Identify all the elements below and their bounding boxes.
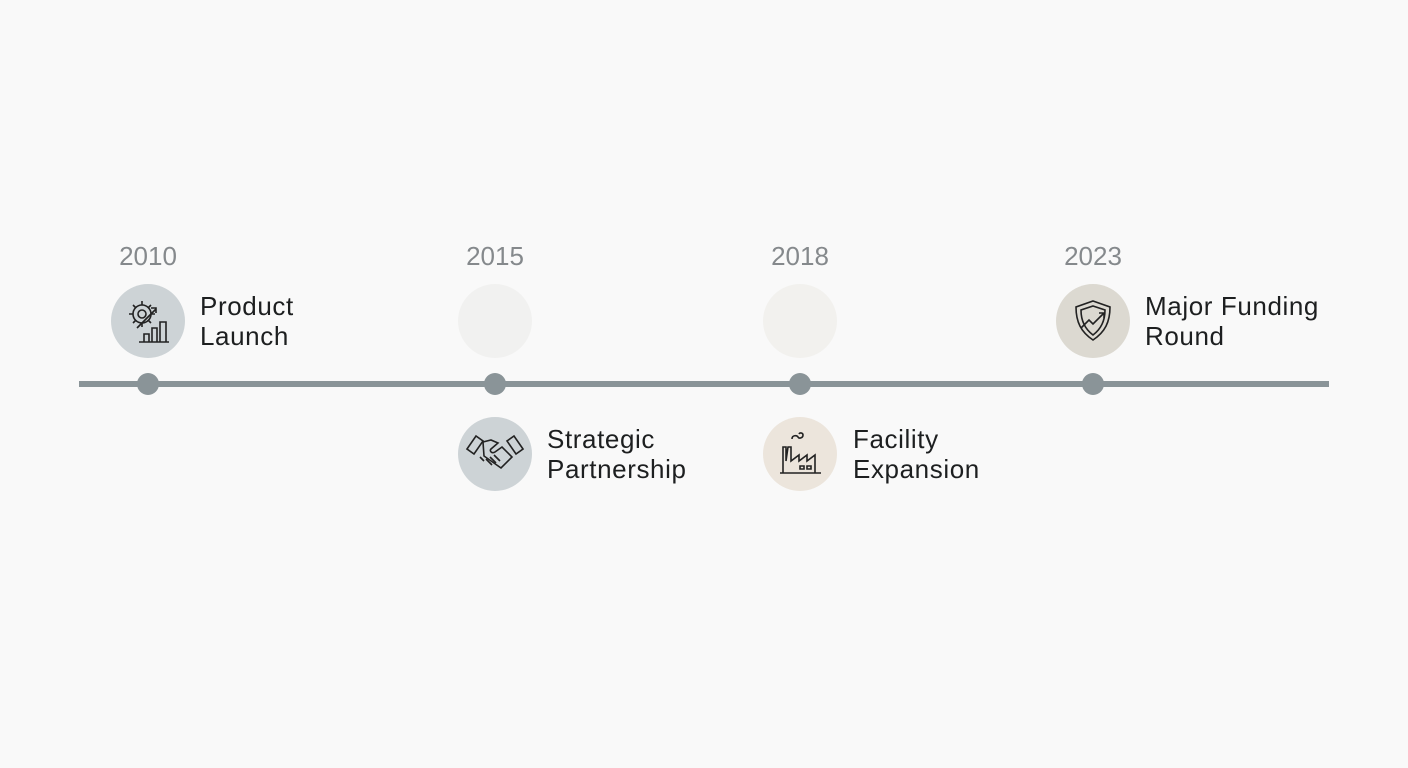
timeline axis bbox=[79, 381, 1329, 387]
label: Facility Expansion: Facility bbox=[853, 424, 939, 454]
icon: gear chart bbox=[111, 284, 185, 358]
label: Major Funding Round: Round bbox=[1145, 321, 1225, 351]
label: Strategic Partnership: Strategic bbox=[547, 424, 655, 454]
label: Product Launch: Product bbox=[200, 291, 294, 321]
year 2015: 2015 bbox=[466, 241, 524, 271]
year 2018: 2018 bbox=[771, 241, 829, 271]
label: Facility Expansion bbox=[853, 424, 980, 484]
label: Major Funding Round: Major Funding bbox=[1145, 291, 1319, 321]
icon: handshake bbox=[458, 417, 532, 491]
label: Product Launch: Launch bbox=[200, 321, 289, 351]
year 2010: 2010 bbox=[119, 241, 177, 271]
icon: factory bbox=[763, 417, 837, 491]
label: Facility Expansion: Expansion bbox=[853, 454, 980, 484]
ghost circle 2018 bbox=[763, 284, 837, 358]
ghost circle 2015 bbox=[458, 284, 532, 358]
year 2023: 2023 bbox=[1064, 241, 1122, 271]
icon: shield bbox=[1056, 284, 1130, 358]
label: Strategic Partnership: Partnership bbox=[547, 454, 687, 484]
label: Major Funding Round bbox=[1145, 291, 1319, 351]
label: Strategic Partnership bbox=[547, 424, 687, 484]
label: Product Launch bbox=[200, 291, 294, 351]
